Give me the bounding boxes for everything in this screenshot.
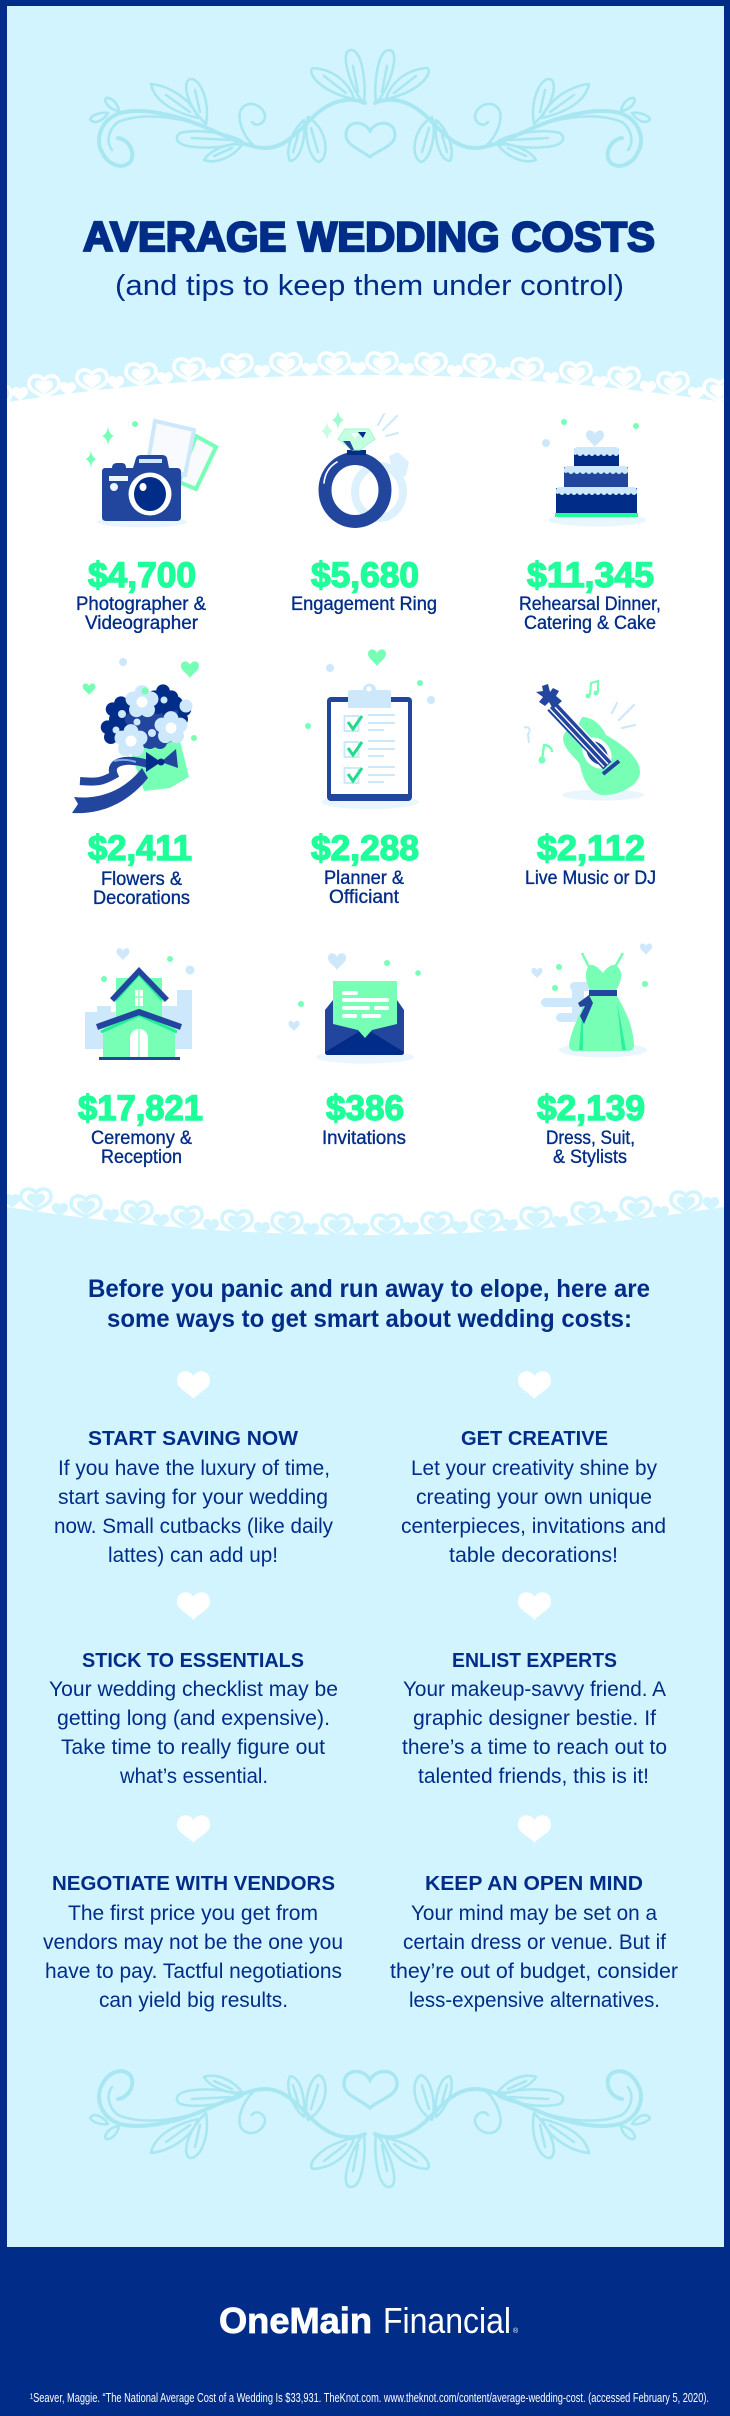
ornament: top flourish [90,50,650,166]
icon: venue house [85,948,194,1060]
tip body: Let your creativity shine by [411,1457,657,1480]
icon: heart [518,1371,551,1399]
label: ring: Engagement Ring [291,594,437,615]
subtitle: (and tips to keep them under control) [115,270,624,302]
footer band [0,2247,730,2416]
tip: get creative [401,1371,666,1567]
icon: heart [518,1815,551,1843]
intro heading [88,1275,650,1333]
tip body [43,1902,343,2012]
tip body: Take time to really figure out [61,1736,325,1759]
tip body: certain dress or venue. But if [403,1931,666,1954]
tip body [49,1678,338,1788]
tip body [401,1457,666,1567]
intro heading: some ways to get smart about wedding costs: [107,1305,632,1333]
tip body: table decorations! [449,1544,618,1567]
icon: invitation envelope [288,953,421,1064]
label: catering: Catering & Cake [524,613,656,634]
tip body: graphic designer bestie. If [413,1707,656,1730]
tip heading: KEEP AN OPEN MIND [425,1873,643,1895]
tip body: have to pay. Tactful negotiations [45,1960,342,1983]
tip heading: STICK TO ESSENTIALS [82,1650,304,1672]
label: flowers: Flowers & [101,869,182,890]
icon: heart [518,1592,551,1620]
icon: top ornament heart [346,123,395,157]
tip: stick to essentials [49,1592,338,1788]
tip body [54,1457,333,1567]
label: planner: Officiant [329,887,400,908]
label: ceremony [91,1128,192,1168]
tip body [402,1678,667,1788]
tip heading: ENLIST EXPERTS [452,1650,617,1672]
icon: heart [177,1592,210,1620]
price: planner: $2,288 [311,829,419,868]
tip body: what’s essential. [119,1765,268,1788]
tip heading: NEGOTIATE WITH VENDORS [52,1873,335,1895]
logo: OneMain Financial: OneMain [219,2300,372,2341]
tip body: creating your own unique [416,1486,652,1509]
label: catering: Rehearsal Dinner, [519,594,661,615]
icon: clipboard [305,649,435,809]
label: flowers [93,869,190,909]
label: music: Live Music or DJ [525,868,656,889]
label: planner: Planner & [324,868,404,889]
label: attire: Dress, Suit, [546,1128,635,1149]
label: attire [546,1128,635,1168]
tip body: The first price you get from [68,1902,318,1925]
lace border: top hearts [0,353,730,407]
title: AVERAGE WEDDING COSTS [83,213,655,260]
label: photographer: Videographer [85,613,199,634]
price: attire: $2,139 [537,1089,645,1128]
tip body: vendors may not be the one you [43,1931,343,1954]
label: planner [324,868,404,908]
icon: bouquet [72,658,199,813]
logo: OneMain Financial: ® [513,2327,519,2335]
tip body: start saving for your wedding [58,1486,328,1509]
price: music: $2,112 [537,829,645,868]
tip heading: GET CREATIVE [461,1428,608,1450]
tip body: now. Small cutbacks (like daily [54,1515,333,1538]
price: catering: $11,345 [527,556,654,595]
label: ceremony: Ceremony & [91,1128,192,1149]
tip body: talented friends, this is it! [418,1765,649,1788]
tip body: centerpieces, invitations and [401,1515,666,1538]
tip body: getting long (and expensive). [57,1707,330,1730]
ornament: bottom flourish [90,2071,650,2187]
icon: guitar [524,681,644,800]
tip: enlist experts [402,1592,667,1788]
price: ceremony: $17,821 [78,1089,203,1128]
icon: heart [177,1371,210,1399]
icon: dress [531,943,652,1058]
icon: bottom ornament heart [344,2071,397,2108]
label: ceremony: Reception [101,1147,182,1168]
tip body: If you have the luxury of time, [58,1457,330,1480]
logo: OneMain Financial: Financial [383,2300,511,2341]
tip: keep an open mind [390,1815,678,2012]
label: catering [519,594,661,634]
label: invitations: Invitations [322,1128,406,1149]
tip body: Your makeup-savvy friend. A [403,1678,666,1701]
tip body: can yield big results. [99,1989,288,2012]
tip heading: START SAVING NOW [88,1428,298,1450]
tip body: they’re out of budget, consider [390,1960,678,1983]
price: photographer: $4,700 [88,556,196,595]
label: photographer [76,594,206,634]
tip body: there’s a time to reach out to [402,1736,667,1759]
price: flowers: $2,411 [88,829,192,868]
lace border: bottom hearts [4,1189,719,1237]
tip: negotiate with vendors [43,1815,343,2012]
logo: OneMain Financial [219,2300,519,2341]
icon: heart [177,1815,210,1843]
price: invitations: $386 [326,1089,404,1128]
price: ring: $5,680 [311,556,419,595]
label: flowers: Decorations [93,888,190,909]
tip body [390,1902,678,2012]
tip body: less-expensive alternatives. [409,1989,660,2012]
label: photographer: Photographer & [76,594,206,615]
label: attire: & Stylists [553,1147,627,1168]
icon: camera [86,421,216,528]
tip body: lattes) can add up! [108,1544,278,1567]
tip: start saving now [54,1371,333,1567]
panel: white cost section [7,375,724,1235]
icon: engagement ring [321,411,409,522]
intro heading: Before you panic and run away to elope, here are [88,1275,650,1303]
icon: cake [542,419,646,526]
tip body: Your wedding checklist may be [49,1678,338,1701]
tip body: Your mind may be set on a [411,1902,657,1925]
